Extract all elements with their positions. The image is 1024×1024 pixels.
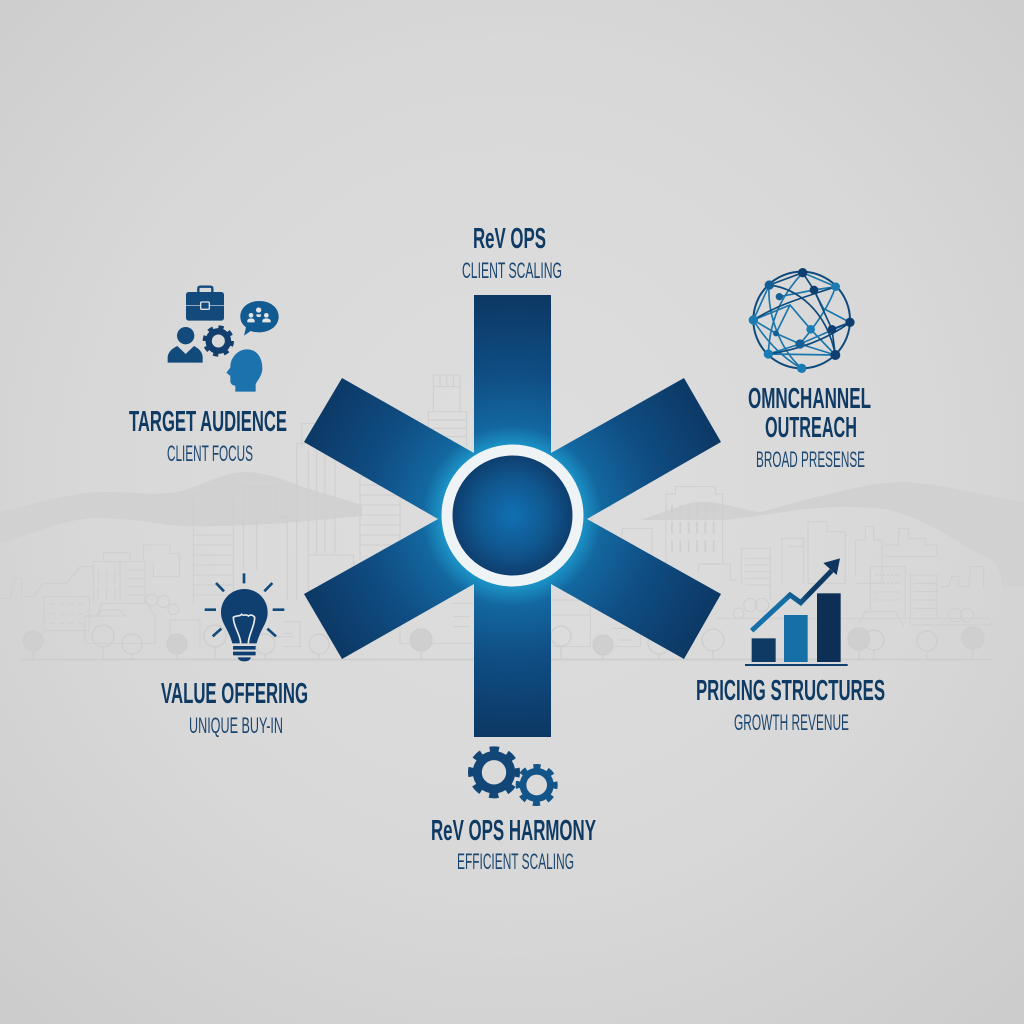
background trees and ground line <box>21 625 992 660</box>
block: ReV Ops Harmony: ReV OPS HARMONY <box>431 815 596 847</box>
block: ReV Ops Harmony <box>431 750 596 874</box>
block: Omnichannel Outreach <box>748 268 871 472</box>
icon: gears <box>471 750 555 803</box>
speech bubble <box>240 301 279 336</box>
central asterisk hub <box>304 295 721 737</box>
block: ReV Ops Harmony: EFFICIENT SCALING <box>457 849 574 874</box>
icon: target audience cluster <box>168 287 279 392</box>
arm: lower left <box>304 516 490 659</box>
block: Target Audience <box>129 287 287 466</box>
background hills <box>0 472 1024 587</box>
block: Target Audience: TARGET AUDIENCE <box>129 406 287 438</box>
arm: lower right <box>535 516 721 659</box>
arm: upper right <box>535 378 721 519</box>
gear <box>205 327 232 355</box>
white ring <box>447 450 578 581</box>
block: Pricing Structures: PRICING STRUCTURES <box>696 675 885 707</box>
person <box>168 327 203 363</box>
block: Value Offering: VALUE OFFERING <box>161 678 308 710</box>
block: Omnichannel Outreach: BROAD PRESENSE <box>756 447 865 472</box>
block: Omnichannel Outreach: OUTREACH <box>765 412 857 444</box>
center disc <box>452 454 574 576</box>
arm: upper left <box>304 378 490 519</box>
head silhouette <box>226 349 262 392</box>
icon: network globe <box>749 268 855 373</box>
block: Value Offering <box>161 573 308 738</box>
vertical bar <box>474 295 551 737</box>
background city skyline, right <box>552 487 992 647</box>
block: Pricing Structures <box>696 558 885 735</box>
block: ReV Ops <box>462 223 562 283</box>
briefcase <box>186 287 224 321</box>
block: ReV Ops: CLIENT SCALING <box>462 258 562 283</box>
icon: light bulb <box>205 573 284 661</box>
background city skyline, left <box>0 375 473 647</box>
block: ReV Ops: ReV OPS <box>473 223 546 255</box>
block: Omnichannel Outreach: OMNCHANNEL <box>748 383 871 415</box>
block: Target Audience: CLIENT FOCUS <box>167 441 253 466</box>
block: Pricing Structures: GROWTH REVENUE <box>734 710 849 735</box>
icon: growth bar chart <box>745 558 848 665</box>
block: Value Offering: UNIQUE BUY-IN <box>189 713 283 738</box>
